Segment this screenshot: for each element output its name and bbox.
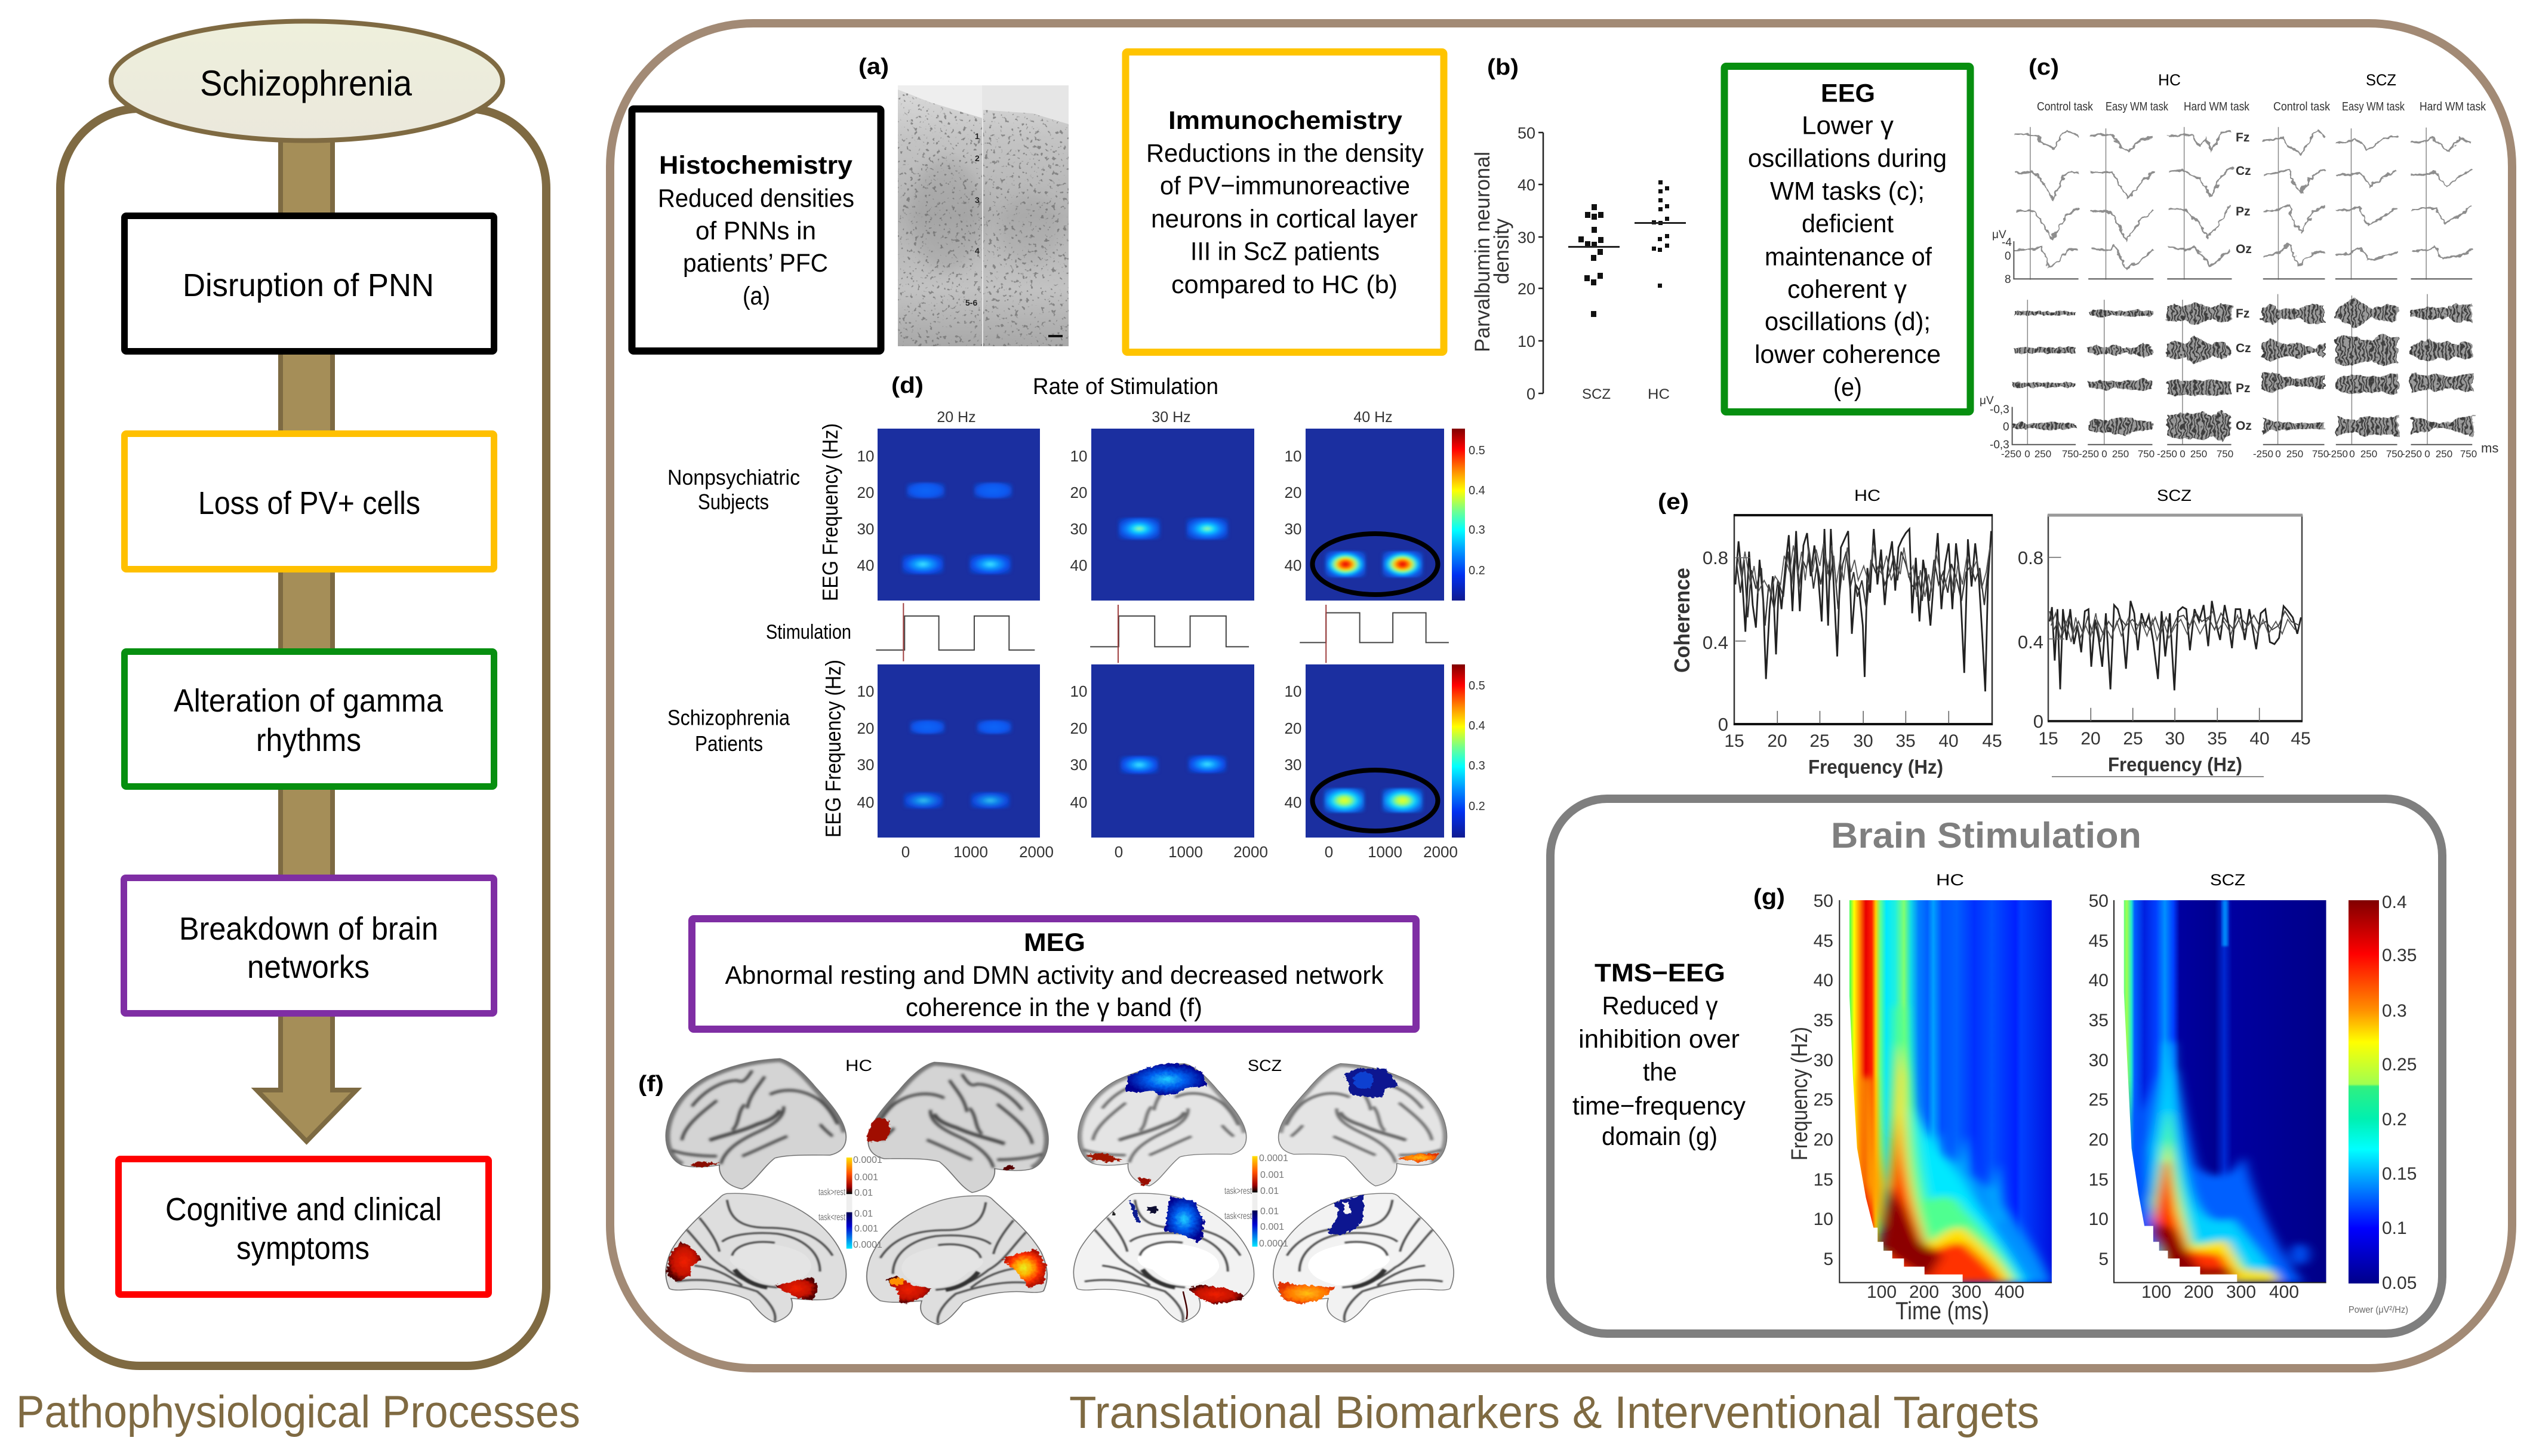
box: histochemistry: [632, 109, 881, 351]
chart (d): gamma response heat maps: 40 Hz: [1353, 409, 1393, 426]
chart (e): coherence plots: 0: [2033, 711, 2043, 732]
chart (g): time-frequency maps: 25: [2089, 1090, 2109, 1110]
chart (g): time-frequency maps: 300: [1952, 1282, 1981, 1302]
chart (e): coherence plots: 45: [1982, 731, 2002, 751]
chart (d): gamma response heat maps: 20: [857, 484, 874, 501]
header oval: schizophrenia: Schizophrenia: [200, 63, 413, 103]
chart (g): time-frequency maps: 50: [2089, 891, 2109, 911]
micrograph: cortical section: 2: [975, 153, 980, 163]
chart (c): EEG waveforms: -250: [2402, 448, 2422, 460]
chart (c): EEG waveforms: -0,3: [1990, 404, 2009, 416]
chart (f): brain surface maps: task>rest: [1224, 1186, 1252, 1196]
chart (c): EEG waveforms: Easy WM task: [2342, 100, 2405, 113]
header oval: schizophrenia: [111, 21, 503, 141]
chart (d): gamma response heat maps: 2000: [1233, 843, 1268, 861]
chart (e): coherence plots: Frequency (Hz): [1808, 756, 1943, 778]
chart (g): time-frequency maps: 10: [2089, 1209, 2109, 1229]
chart (c): EEG waveforms: 0: [2349, 448, 2355, 460]
chart (c): EEG waveforms: 750: [2386, 448, 2403, 460]
chart (e): coherence plots: 30: [1853, 731, 1873, 751]
chart (g): time-frequency maps: 300: [2226, 1282, 2256, 1302]
chart (d): gamma response heat maps: EEG Frequency (Hz): [818, 423, 842, 601]
box: EEG: oscillations (d);: [1765, 307, 1931, 336]
chart (g): time-frequency maps: 20: [2089, 1130, 2109, 1150]
chart (c): EEG waveforms: Oz: [2236, 242, 2252, 256]
chart (f): brain surface maps: 0.0001: [1259, 1239, 1288, 1249]
chart (d): gamma response heat maps: 40: [1285, 556, 1301, 574]
chart (f): brain surface maps: 0.01: [854, 1209, 873, 1219]
chart (g): time-frequency maps: 0.05: [2382, 1273, 2417, 1293]
chart (d): gamma response heat maps: 1000: [1368, 843, 1402, 861]
chart (d): gamma response heat maps: 20: [1070, 484, 1087, 501]
text block: TMS-EEG: [1572, 959, 1746, 1151]
chart (c): EEG waveforms: 250: [2112, 448, 2129, 460]
box: EEG: maintenance of: [1765, 242, 1932, 271]
right caption: Translational Biomarkers & Interventional Targets: [1069, 1387, 2039, 1438]
chart (c): EEG waveforms: Easy WM task: [2106, 100, 2169, 113]
chart (c): EEG waveforms: Hard WM task: [2420, 100, 2486, 113]
chart (c): EEG waveforms: 8: [2005, 273, 2011, 286]
panel: translational biomarkers frame: [610, 23, 2512, 1368]
chart (d): gamma response heat maps: 10: [857, 682, 874, 700]
chart (f): brain surface maps: 0.01: [1260, 1206, 1279, 1217]
chart (b): parvalbumin scatter: density: [1490, 218, 1513, 284]
chart (e): coherence plots: 20: [1767, 731, 1787, 751]
chart (d): gamma response heat maps: 10: [857, 447, 874, 465]
box: disruption of PNN: [124, 216, 494, 351]
micrograph: cortical section: 5-6: [965, 298, 977, 307]
label (e): (e): [1658, 490, 1689, 515]
chart (c): EEG waveforms: -250: [2328, 448, 2348, 460]
box: histochemistry: (a): [743, 282, 770, 310]
box: immunochemistry: Immunochemistry: [1168, 106, 1402, 135]
chart (d): gamma response heat maps: 0.3: [1469, 759, 1485, 772]
chart (g): time-frequency maps: 50: [1814, 891, 1833, 911]
chart (c): EEG waveforms: 0: [2005, 250, 2011, 263]
box: immunochemistry: compared to HC (b): [1171, 270, 1398, 299]
chart (g): time-frequency maps: 30: [2089, 1051, 2109, 1070]
heading: brain stimulation: Brain Stimulation: [1831, 815, 2141, 855]
chart (e): coherence plots: 45: [2291, 729, 2311, 749]
chart (e): coherence plots: 15: [2038, 729, 2058, 749]
chart (d): gamma response heat maps: 30: [1070, 756, 1087, 774]
chart (f): brain surface maps: 0.0001: [853, 1155, 882, 1165]
chart (d): gamma response heat maps: 40: [1285, 793, 1301, 811]
chart (g): time-frequency maps: 30: [1814, 1051, 1833, 1070]
chart (d): gamma response heat maps: 0.4: [1469, 719, 1485, 732]
chart (c): EEG waveforms: -0,3: [1990, 439, 2009, 451]
chart (c): EEG waveforms: Control task: [2037, 100, 2094, 113]
chart (d): gamma response heat maps: 40: [1070, 793, 1087, 811]
box: alteration of gamma rhythms: rhythms: [256, 722, 361, 758]
chart (c): EEG waveforms: ms: [2481, 441, 2498, 455]
chart (d): gamma response heat maps: 0.2: [1469, 800, 1485, 813]
box: loss of PV+ cells: Loss of PV+ cells: [198, 485, 420, 521]
chart (g): time-frequency maps: 0.2: [2382, 1110, 2407, 1129]
chart (d): gamma response heat maps: Patients: [695, 731, 763, 756]
chart (f): brain surface maps: 0.001: [1260, 1170, 1284, 1180]
chart (d): gamma response heat maps: 40: [857, 556, 874, 574]
box: EEG: [1724, 66, 1970, 412]
label (a): (a): [858, 54, 889, 79]
chart (g): time-frequency maps: 35: [2089, 1011, 2109, 1030]
chart (c): EEG waveforms: μV: [1992, 229, 2006, 241]
chart (g): time-frequency maps: 40: [1814, 971, 1833, 990]
box: cognitive and clinical symptoms: Cognitive and clinical: [165, 1192, 442, 1227]
box: immunochemistry: [1126, 52, 1443, 352]
box: breakdown of brain networks: [124, 878, 494, 1014]
chart (d): gamma response heat maps: 0: [1115, 843, 1123, 861]
chart (c): EEG waveforms: HC: [2158, 71, 2181, 89]
chart (e): coherence plots: 25: [1809, 731, 1830, 751]
text block: TMS-EEG: TMS−EEG: [1595, 959, 1725, 987]
chart (f): brain surface maps: task>rest: [818, 1187, 845, 1198]
chart (e): coherence plots: 30: [2165, 729, 2185, 749]
chart (d): gamma response heat maps: 0.3: [1469, 524, 1485, 537]
chart (d): gamma response heat maps: 20: [1285, 719, 1301, 737]
chart (e): coherence plots: [1670, 487, 2311, 778]
chart (e): coherence plots: Coherence: [1670, 568, 1694, 673]
box: EEG: WM tasks (c);: [1770, 177, 1925, 205]
panel: pathophysiological processes frame: [60, 109, 546, 1366]
box: MEG: coherence in the γ band (f): [906, 993, 1202, 1022]
chart (g): time-frequency maps: Power (μV²/Hz): [2349, 1305, 2408, 1315]
chart (d): gamma response heat maps: 30: [1070, 520, 1087, 538]
text block: TMS-EEG: inhibition over: [1578, 1025, 1740, 1054]
micrograph: cortical section: 3: [975, 195, 980, 205]
text block: TMS-EEG: Reduced γ: [1602, 992, 1718, 1020]
chart (f): brain surface maps: task<rest: [818, 1212, 845, 1223]
chart (c): EEG waveforms: Control task: [2273, 100, 2331, 113]
box: EEG: deficient: [1802, 210, 1894, 238]
chart (c): EEG waveforms: -250: [2079, 448, 2099, 460]
chart (c): EEG waveforms: 250: [2190, 448, 2207, 460]
box: disruption of PNN: Disruption of PNN: [183, 267, 434, 303]
chart (c): EEG waveforms: Hard WM task: [2184, 100, 2250, 113]
chart (d): gamma response heat maps: 40: [1070, 556, 1087, 574]
chart (g): time-frequency maps: 40: [2089, 971, 2109, 990]
chart (g): time-frequency maps: HC: [1936, 871, 1964, 889]
chart (d): gamma response heat maps: 10: [1285, 682, 1301, 700]
chart (e): coherence plots: 0.4: [1703, 632, 1728, 653]
chart (b): parvalbumin scatter: HC: [1648, 386, 1670, 402]
chart (e): coherence plots: 20: [2080, 729, 2101, 749]
micrograph: cortical section: 1: [975, 131, 980, 141]
chart (f): brain surface maps: 0.01: [1260, 1186, 1279, 1196]
chart (g): time-frequency maps: 5: [1823, 1249, 1833, 1269]
chart (d): gamma response heat maps: 10: [1070, 682, 1087, 700]
chart (c): EEG waveforms: Pz: [2236, 381, 2251, 395]
panel: brain stimulation: [1550, 799, 2442, 1334]
chart (c): EEG waveforms: -4: [2002, 236, 2012, 249]
chart (g): time-frequency maps: 0.1: [2382, 1218, 2407, 1238]
box: EEG: lower coherence: [1755, 340, 1941, 369]
chart (d): gamma response heat maps: 30: [857, 756, 874, 774]
chart (d): gamma response heat maps: 1000: [953, 843, 988, 861]
chart (b): parvalbumin scatter: 0: [1526, 385, 1535, 403]
box: EEG: Lower γ: [1802, 111, 1894, 140]
chart (d): gamma response heat maps: 20: [857, 719, 874, 737]
chart (e): coherence plots: 15: [1724, 731, 1744, 751]
chart (c): EEG waveforms: μV: [1980, 395, 1994, 407]
box: breakdown of brain networks: networks: [247, 949, 370, 985]
box: EEG: coherent γ: [1787, 275, 1907, 304]
chart (e): coherence plots: HC: [1854, 487, 1880, 504]
chart (c): EEG waveforms: 0: [2424, 448, 2430, 460]
chart (d): gamma response heat maps: 10: [1070, 447, 1087, 465]
chart (g): time-frequency maps: 200: [1909, 1282, 1939, 1302]
chart (g): time-frequency maps: SCZ: [2210, 871, 2245, 889]
box: immunochemistry: neurons in cortical layer: [1151, 205, 1418, 233]
chart (g): time-frequency maps: 35: [1814, 1011, 1833, 1030]
chart (d): gamma response heat maps: 0: [901, 843, 910, 861]
chart (b): parvalbumin scatter: 20: [1518, 280, 1535, 298]
chart (d): gamma response heat maps: Stimulation: [766, 621, 851, 644]
box: loss of PV+ cells: [124, 433, 494, 570]
chart (c): EEG waveforms: [1980, 71, 2498, 460]
chart (c): EEG waveforms: 250: [2436, 448, 2452, 460]
label (b): (b): [1487, 55, 1519, 80]
chart (e): coherence plots: 0.8: [1703, 547, 1728, 568]
chart (c): EEG waveforms: -250: [2157, 448, 2177, 460]
chart (e): coherence plots: 40: [2249, 729, 2270, 749]
chart (d): gamma response heat maps: 0.2: [1469, 564, 1485, 577]
chart (g): time-frequency maps: 400: [1995, 1282, 2024, 1302]
chart (g): time-frequency maps: Frequency (Hz): [1787, 1027, 1812, 1161]
box: MEG: MEG: [1024, 928, 1085, 957]
chart (f): brain surface maps: 0.0001: [853, 1240, 882, 1250]
chart (c): EEG waveforms: SCZ: [2366, 71, 2396, 89]
chart (d): gamma response heat maps: [667, 374, 1485, 861]
box: MEG: [692, 919, 1416, 1029]
chart (d): gamma response heat maps: 2000: [1019, 843, 1054, 861]
chart (g): time-frequency maps: 0.3: [2382, 1001, 2407, 1021]
box: cognitive and clinical symptoms: [118, 1159, 488, 1294]
chart (d): gamma response heat maps: 1000: [1168, 843, 1203, 861]
chart (d): gamma response heat maps: EEG Frequency (Hz): [821, 660, 845, 838]
chart (d): gamma response heat maps: 30: [857, 520, 874, 538]
chart (d): gamma response heat maps: 30: [1285, 520, 1301, 538]
chart (e): coherence plots: 35: [1895, 731, 1916, 751]
chart (d): gamma response heat maps: Subjects: [698, 490, 769, 514]
chart (d): gamma response heat maps: 30 Hz: [1152, 409, 1191, 426]
chart (f): brain surface maps: task<rest: [1224, 1211, 1252, 1221]
chart (f): brain surface maps: 0.001: [1260, 1222, 1284, 1232]
chart (g): time-frequency maps: 0.4: [2382, 892, 2407, 912]
chart (g): time-frequency maps: 45: [1814, 931, 1833, 951]
chart (g): time-frequency maps: 100: [1867, 1282, 1897, 1302]
chart (g): time-frequency maps: 0.35: [2382, 946, 2417, 965]
chart (c): EEG waveforms: 750: [2062, 448, 2079, 460]
chart (b): parvalbumin scatter: SCZ: [1582, 386, 1611, 402]
chart (b): parvalbumin scatter: 40: [1518, 176, 1535, 194]
micrograph: cortical section: [898, 85, 1069, 346]
chart (d): gamma response heat maps: 20 Hz: [937, 409, 976, 426]
chart (d): gamma response heat maps: 40: [857, 793, 874, 811]
chart (c): EEG waveforms: Fz: [2236, 131, 2249, 144]
text block: TMS-EEG: domain (g): [1602, 1122, 1718, 1151]
box: histochemistry: Histochemistry: [659, 151, 852, 180]
chart (e): coherence plots: 40: [1938, 731, 1959, 751]
chart (f): brain surface maps: HC: [845, 1057, 872, 1075]
box: MEG: Abnormal resting and DMN activity and decreased network: [725, 961, 1384, 990]
chart (d): gamma response heat maps: 0.5: [1469, 444, 1485, 457]
chart (b): parvalbumin scatter: Parvalbumin neuronal: [1471, 152, 1494, 352]
box: alteration of gamma rhythms: [124, 652, 494, 787]
chart (g): time-frequency maps: 0.15: [2382, 1164, 2417, 1184]
box: histochemistry: patients’ PFC: [683, 249, 828, 278]
chart (e): coherence plots: Frequency (Hz): [2108, 753, 2242, 775]
chart (e): coherence plots: 0.8: [2018, 547, 2043, 568]
chart (g): time-frequency maps: 45: [2089, 931, 2109, 951]
box: breakdown of brain networks: Breakdown of brain: [179, 911, 438, 947]
text block: TMS-EEG: the: [1643, 1058, 1677, 1086]
chart (b): parvalbumin scatter: 50: [1518, 124, 1535, 142]
chart (f): brain surface maps: 0.001: [854, 1172, 878, 1183]
chart (d): gamma response heat maps: 2000: [1423, 843, 1458, 861]
chart (f): brain surface maps: 0.01: [854, 1188, 873, 1198]
chart (g): time-frequency maps: 0.25: [2382, 1055, 2417, 1075]
box: EEG: oscillations during: [1748, 144, 1947, 173]
chart (d): gamma response heat maps: 30: [1285, 756, 1301, 774]
chart (g): time-frequency maps: 200: [2184, 1282, 2214, 1302]
chart (c): EEG waveforms: 0: [2180, 448, 2186, 460]
chart (d): gamma response heat maps: Rate of Stimulation: [1033, 374, 1218, 399]
chart (e): coherence plots: 35: [2207, 729, 2227, 749]
chart (c): EEG waveforms: -250: [2253, 448, 2273, 460]
chart (d): gamma response heat maps: 10: [1285, 447, 1301, 465]
chart (f): brain surface maps: 0.0001: [1259, 1153, 1288, 1163]
chart (d): gamma response heat maps: Nonpsychiatric: [667, 465, 800, 490]
chart (e): coherence plots: 25: [2123, 729, 2143, 749]
chart (g): time-frequency maps: 20: [1814, 1130, 1833, 1150]
chart (d): gamma response heat maps: 20: [1070, 719, 1087, 737]
chart (e): coherence plots: SCZ: [2157, 487, 2192, 504]
box: alteration of gamma rhythms: Alteration of gamma: [174, 683, 444, 719]
chart (g): time-frequency maps: 100: [2141, 1282, 2171, 1302]
chart (c): EEG waveforms: 750: [2312, 448, 2329, 460]
chart (c): EEG waveforms: Oz: [2236, 419, 2252, 433]
chart (d): gamma response heat maps: 0.4: [1469, 484, 1485, 497]
chart (c): EEG waveforms: 250: [2286, 448, 2303, 460]
label (f): (f): [638, 1072, 664, 1097]
box: cognitive and clinical symptoms: symptoms: [236, 1230, 370, 1266]
text block: TMS-EEG: time−frequency: [1572, 1092, 1746, 1121]
chart (d): gamma response heat maps: 0.5: [1469, 679, 1485, 692]
chart (c): EEG waveforms: Pz: [2236, 205, 2251, 218]
box: histochemistry: Reduced densities: [658, 184, 854, 213]
box: immunochemistry: Reductions in the density: [1146, 139, 1424, 168]
chart (c): EEG waveforms: Cz: [2236, 341, 2251, 355]
chart (g): time-frequency maps: 10: [1814, 1209, 1833, 1229]
box: EEG: (e): [1833, 373, 1862, 402]
box: immunochemistry: of PV−immunoreactive: [1160, 172, 1410, 201]
chart (d): gamma response heat maps: 20: [1285, 484, 1301, 501]
arrow: downward causal chain: [257, 137, 356, 1141]
chart (g): time-frequency maps: 5: [2098, 1249, 2109, 1269]
chart (d): gamma response heat maps: Schizophrenia: [667, 706, 790, 729]
chart (c): EEG waveforms: 250: [2035, 448, 2051, 460]
chart (e): coherence plots: 0.4: [2018, 632, 2043, 652]
chart (g): time-frequency maps: 15: [1814, 1170, 1833, 1190]
chart (e): coherence plots: 0: [1718, 714, 1728, 735]
chart (f): brain surface maps: [666, 1057, 1454, 1325]
chart (g): time-frequency maps: 25: [1814, 1090, 1833, 1110]
chart (c): EEG waveforms: -250: [2001, 448, 2021, 460]
chart (b): parvalbumin scatter: 10: [1518, 333, 1535, 350]
chart (g): time-frequency maps: Time (ms): [1895, 1297, 1989, 1325]
chart (b): parvalbumin scatter: [1471, 124, 1686, 403]
chart (c): EEG waveforms: 0: [2275, 448, 2281, 460]
label (c): (c): [2029, 55, 2059, 80]
chart (d): gamma response heat maps: 0: [1325, 843, 1333, 861]
box: EEG: EEG: [1821, 79, 1875, 107]
chart (c): EEG waveforms: 0: [2003, 421, 2009, 433]
chart (g): time-frequency maps: 15: [2089, 1170, 2109, 1190]
label (g): (g): [1753, 885, 1785, 910]
box: histochemistry: of PNNs in: [695, 217, 816, 245]
chart (g): time-frequency maps: [1787, 871, 2417, 1325]
chart (c): EEG waveforms: 250: [2360, 448, 2377, 460]
chart (c): EEG waveforms: 750: [2138, 448, 2154, 460]
chart (c): EEG waveforms: Cz: [2236, 164, 2251, 178]
micrograph: cortical section: 4: [975, 246, 980, 256]
box: immunochemistry: III in ScZ patients: [1190, 238, 1380, 266]
chart (c): EEG waveforms: 0: [2101, 448, 2107, 460]
chart (f): brain surface maps: 0.001: [854, 1224, 878, 1234]
chart (c): EEG waveforms: Fz: [2236, 307, 2249, 321]
chart (c): EEG waveforms: 750: [2460, 448, 2477, 460]
label (d): (d): [891, 373, 924, 398]
chart (c): EEG waveforms: 750: [2217, 448, 2233, 460]
chart (b): parvalbumin scatter: 30: [1518, 229, 1535, 247]
chart (f): brain surface maps: SCZ: [1248, 1057, 1282, 1075]
chart (g): time-frequency maps: 400: [2269, 1282, 2299, 1302]
chart (c): EEG waveforms: 0: [2024, 448, 2030, 460]
left caption: Pathophysiological Processes: [16, 1387, 580, 1437]
